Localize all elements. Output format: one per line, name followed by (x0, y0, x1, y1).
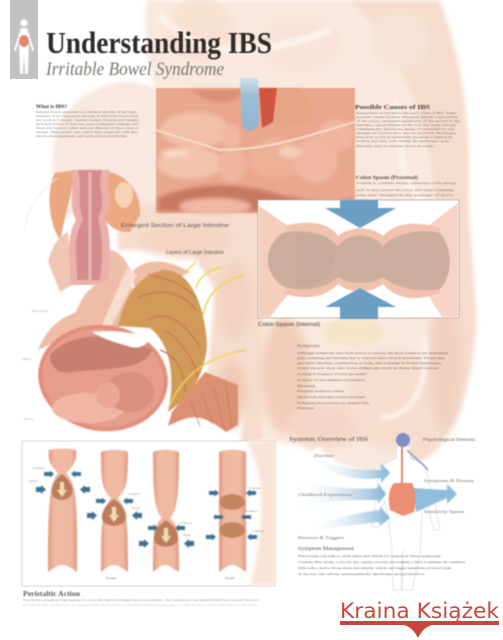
tube 3 (139, 450, 194, 572)
tube labels: Contract (252, 529, 264, 533)
text block: symptom management: Physicians can talk to each other and check for causes of these symptoms. (298, 554, 442, 558)
title: Understanding IBS (46, 26, 272, 60)
tube labels: Contract (180, 521, 192, 525)
illustration: section of large intestine (25, 170, 140, 305)
text block: possible causes of IBS: Possible Causes of IBS (355, 104, 431, 111)
icon: digestive organs (389, 446, 428, 516)
tube 1 (36, 448, 90, 572)
text block: possible causes of IBS: intestine, and problems in the way the brain and gut (356, 123, 456, 128)
text block: symptoms: Although symptoms vary from person to person, the most common are abdominal (297, 351, 448, 356)
text block: what is IBS: Irritable bowel syndrome is a common disorder of the large (36, 110, 137, 114)
text block: possible causes of IBS: A spasm is a sudden, strong contraction of the muscle (356, 181, 457, 186)
diagram labels: Diarrhea (314, 453, 333, 458)
text block: peristaltic action: Peristaltic Action (23, 590, 80, 598)
lumen (268, 231, 450, 290)
text block: symptoms: Some people may also have symptoms such as these listed below: (297, 366, 439, 370)
diagram labels: Symptoms & Disease (424, 478, 474, 483)
labels: wall layers (22, 309, 48, 421)
text block: peristaltic action: In a spasm, this normal wave is disrupted and contractions are irregular, making the passage of waste slower or faster than usual for the body. (23, 603, 257, 608)
text block: possible causes of IBS: wall. It may narrow the colon and cause cramping, (356, 188, 454, 193)
text block: possible causes of IBS: possible causes include abnormal muscle contractions (356, 115, 459, 119)
text block: symptom management: Talk with a doctor about stress and anxiety, which can trigger symptoms of bowel pain. (298, 566, 452, 571)
text block: symptoms: also have diarrhea, constipation or both, and a change in bowel appearance. (297, 361, 442, 366)
upper wall (38, 279, 135, 350)
lower muscle strip (168, 372, 238, 432)
arrows (36, 470, 90, 494)
labels: wall layers: Muscle (22, 357, 32, 361)
diagram labels: Stressors & Triggers (298, 535, 344, 540)
blue arrows (292, 450, 457, 530)
blood vessels (240, 78, 313, 130)
logo: Kraina Książek (340, 599, 500, 638)
text block: symptoms: A sense of incomplete evacuation (297, 378, 366, 382)
text block: symptom management: Symptom Management (298, 547, 355, 552)
text block: possible causes of IBS: Heredity may be another factor in some. (356, 144, 434, 148)
text block: symptoms: Nausea (297, 406, 315, 410)
text block: possible causes of IBS: communicate. Infections, stress, food sensitivity and (356, 127, 455, 132)
text block: what is IBS: not work as it should, causing cramps, bloating and changes (36, 118, 140, 123)
text block: what is IBS: does not lead to other serious disease of the colon or (36, 126, 139, 130)
text block: possible causes of IBS: of the colon, increased sensitivity of the nerves in the (356, 119, 461, 124)
text block: symptoms: Bloating (297, 384, 316, 388)
heading: spasm normal: Colon Spasm (Proximal) (356, 174, 418, 181)
diagram labels: Sensitivity Spasm (424, 509, 465, 514)
tube labels: Normal (106, 576, 116, 580)
text block: possible causes of IBS: changes in bacteria may also be involved. Hormones (356, 131, 457, 135)
muscular layer (118, 270, 207, 412)
subtitle: Irritable Bowel Syndrome (45, 59, 224, 80)
diagram: systemic overview (292, 433, 474, 590)
text block: peristaltic action: Food moves through the large intestine by a wave-like muscle movement known as peristalsis. The contractions of the muscle behind the food push it forward. (23, 598, 259, 602)
illustration: large intestine cross section (31, 262, 246, 440)
label: psychological distress: Psychological Distress (423, 437, 476, 443)
tube labels: Relax (29, 479, 37, 483)
text block: possible causes of IBS: Researchers do not know the exact cause of IBS. Some (356, 111, 457, 115)
arrow: top pressure (325, 200, 396, 228)
icon: open book (340, 621, 499, 638)
text block: what is IBS: in bowel habits. It does not cause permanent damage and (36, 122, 139, 126)
nerves (170, 262, 246, 405)
tube labels: Contract (246, 509, 258, 513)
white area behind diagram (300, 446, 445, 590)
tube 2 (87, 450, 142, 572)
title (45, 26, 272, 80)
tube labels (29, 466, 264, 580)
icon: body figure tab (10, 0, 38, 79)
labels: wall layers: Mucosa (24, 417, 34, 421)
tube labels: Relax (183, 533, 191, 537)
label: colon spasm: Colon Spasm (Internal) (258, 322, 320, 328)
text block: possible causes of IBS: women and may vary during the menstrual cycle. (356, 139, 450, 143)
colon outline (285, 223, 440, 298)
arrow: bottom pressure (325, 288, 396, 319)
text block: symptoms: Feeling that the bowel has not emptied fully (297, 401, 369, 405)
panel: highlighted large intestine (156, 88, 355, 214)
logo: Kraina Książek: Kraina Książek (340, 599, 500, 624)
panel: colon spasm inset (258, 200, 459, 319)
body figure (372, 446, 440, 590)
diagram labels (298, 453, 474, 540)
text block: peristaltic action (23, 590, 259, 608)
text block: what is IBS: rectum. Many people can control their symptoms with diet, (36, 130, 138, 135)
text block: symptoms: Mucus in the stool after a bowel movement (297, 395, 365, 399)
tube labels: Contract (33, 466, 45, 470)
label: section of large intestine: Enlarged Section of Large Intestine (121, 223, 229, 229)
white gap (92, 331, 150, 347)
text block: possible causes of IBS (355, 104, 461, 197)
text block: symptoms: pain, cramping and bloating that is relieved after a bowel movement. People may (297, 356, 445, 361)
text block: what is IBS: What is IBS? (36, 104, 67, 110)
text block: symptom management (298, 547, 466, 576)
tube labels: Contract (128, 492, 140, 496)
labels: wall layers: Mucosa layer (32, 309, 48, 313)
opening interior (36, 321, 170, 435)
text block: symptom management: Consider fiber intake, a low-fat diet, regular exercise and keeping a diary to manage the condition. (298, 560, 466, 565)
text block: symptoms: Frequent stomach cramps (297, 389, 345, 393)
text block: symptoms (297, 343, 448, 410)
opening rim (31, 316, 175, 440)
text block: symptom management: A doctor can advise antispasmodic medicine and probiotics. (298, 572, 425, 576)
text block: symptoms: Symptoms (297, 343, 321, 348)
label: layers of large intestine: Layers of Large Intestine (166, 250, 224, 256)
tube labels: Relax (132, 506, 140, 510)
tube 4 (206, 450, 257, 572)
tube labels: Spasm (225, 576, 234, 580)
text block: possible causes of IBS: pain and changes in the passage of stool. (356, 193, 454, 197)
panel: peristaltic action (22, 441, 275, 586)
text block: what is IBS (36, 104, 140, 138)
text block: what is IBS: intestine. It is a functional disorder in which the bowel does (36, 114, 139, 118)
diagram labels: Childhood Experiences (298, 492, 352, 497)
text block: symptoms: A change in frequency of bowel movements (297, 372, 368, 376)
heading: systemic overview of IBS: Systemic Overview of IBS (289, 436, 368, 443)
text block: possible causes of IBS: may play a role as symptoms are more common in (356, 135, 453, 139)
colon ends (259, 206, 290, 317)
text block: what is IBS: stress management and prescribed medicine. (36, 134, 128, 138)
tube labels: Contract (249, 486, 261, 490)
icon: head (396, 433, 410, 447)
pale anatomy background (52, 0, 477, 478)
